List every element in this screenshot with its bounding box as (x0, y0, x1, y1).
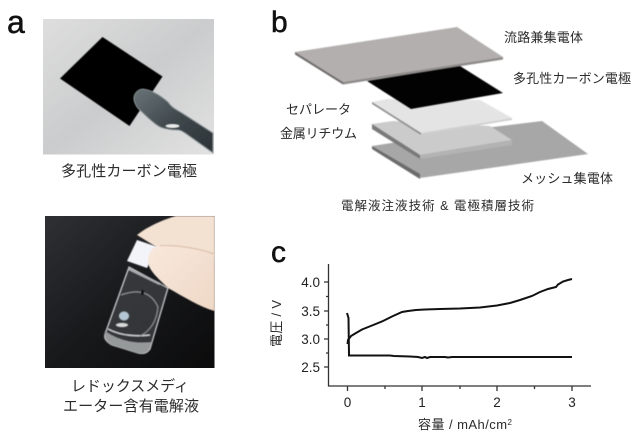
x tick labels: 3 (568, 395, 576, 410)
label: injection and stacking technology: 電解液注液技術 & 電極積層技術 (341, 198, 534, 213)
top current collector (295, 27, 503, 84)
exploded cell stack (295, 27, 588, 179)
label: separator: セパレータ (286, 102, 351, 117)
y tick labels (301, 275, 320, 375)
tweezers (134, 89, 213, 153)
thumb over cap (148, 245, 214, 311)
separator (372, 99, 512, 135)
x tick labels: 1 (418, 395, 426, 410)
label: flow path current collector: 流路兼集電体 (504, 30, 583, 45)
porous carbon electrode layer (367, 66, 503, 109)
y tick labels: 2.5 (301, 360, 320, 375)
black carbon sheet (60, 37, 162, 126)
y tick labels: 4.0 (301, 275, 320, 290)
caption: redox mediator electrolyte: レドックスメディ (71, 377, 189, 395)
caption: redox mediator electrolyte (63, 377, 199, 415)
label: carbon electrode: 多孔性カーボン電極 (513, 71, 631, 86)
mesh current collector (372, 121, 588, 179)
panel: electrolyte (45, 216, 214, 415)
panel: b (271, 6, 631, 213)
x axis title: 容量 / mAh/cm (418, 417, 507, 432)
panel: c (269, 236, 591, 432)
x tick labels (344, 395, 576, 410)
vial white cap (127, 240, 158, 268)
y tick labels: 3.0 (301, 332, 320, 347)
charge curve (348, 279, 572, 344)
label c: c (271, 236, 286, 269)
photo: vial with electrolyte (45, 216, 214, 368)
label: mesh current collector: メッシュ集電体 (521, 171, 613, 186)
panel: a (7, 4, 214, 180)
axes (324, 264, 591, 391)
photo: porous carbon electrode (43, 19, 214, 154)
vial body (105, 267, 168, 354)
y axis title: 電圧 / V (269, 300, 284, 347)
x tick labels: 2 (493, 395, 501, 410)
x tick labels: 0 (344, 395, 351, 410)
label b: b (271, 6, 288, 39)
lithium metal (372, 121, 512, 159)
x axis title: 2 (508, 418, 513, 427)
upper finger (137, 216, 214, 256)
caption: redox mediator electrolyte: エーター含有電解液 (63, 398, 199, 415)
caption: carbon electrode: 多孔性カーボン電極 (61, 162, 197, 180)
discharge curve (347, 313, 572, 358)
label: lithium metal: 金属リチウム (280, 126, 357, 141)
label a: a (7, 4, 25, 40)
line chart (269, 264, 591, 432)
y tick labels: 3.5 (301, 304, 320, 319)
